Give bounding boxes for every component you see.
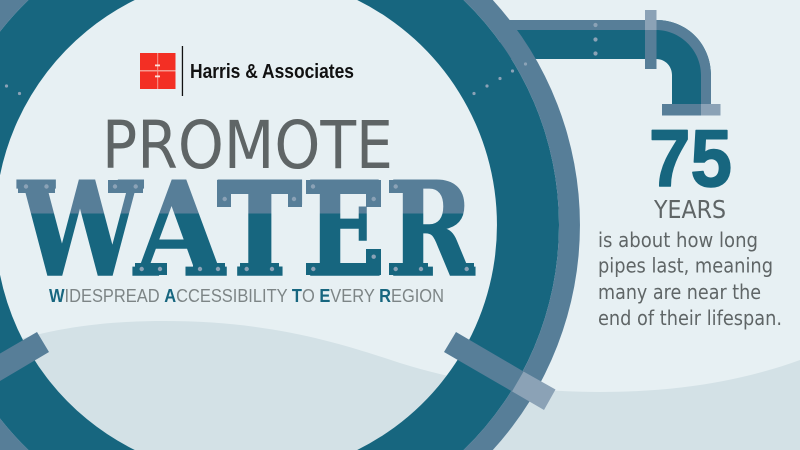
logo <box>140 46 354 96</box>
heading: WATER: T <box>217 153 303 306</box>
pipe flange <box>662 104 720 116</box>
right strap <box>444 332 556 410</box>
heading: PROMOTE: PROMOTE <box>102 107 393 184</box>
statistic description <box>598 228 782 330</box>
large ring pipe <box>0 0 580 450</box>
pipe clamp <box>645 10 656 69</box>
pipe: horizontal section and elbow <box>500 20 711 104</box>
water wave <box>0 321 800 450</box>
statistic label: YEARS: YEARS <box>653 195 726 224</box>
heading: WATER: A <box>133 154 227 307</box>
heading: WATER <box>16 153 476 307</box>
heading: WATER: E <box>306 153 384 306</box>
statistic description: pipes last, meaning <box>598 254 773 278</box>
logo: Harris & Associates <box>190 61 354 83</box>
subtitle: WIDESPREAD ACCESSIBILITY TO EVERY REGION <box>49 285 444 306</box>
statistic description: many are near the <box>598 280 761 304</box>
left strap <box>0 332 49 381</box>
statistic description: end of their lifespan. <box>598 306 782 330</box>
heading: WATER: W <box>16 154 143 306</box>
statistic: 75: 75 <box>649 114 732 204</box>
heading: WATER: R <box>389 153 476 306</box>
ring rivets <box>5 62 527 95</box>
WATER rivets <box>24 184 469 271</box>
statistic description: is about how long <box>598 228 758 252</box>
